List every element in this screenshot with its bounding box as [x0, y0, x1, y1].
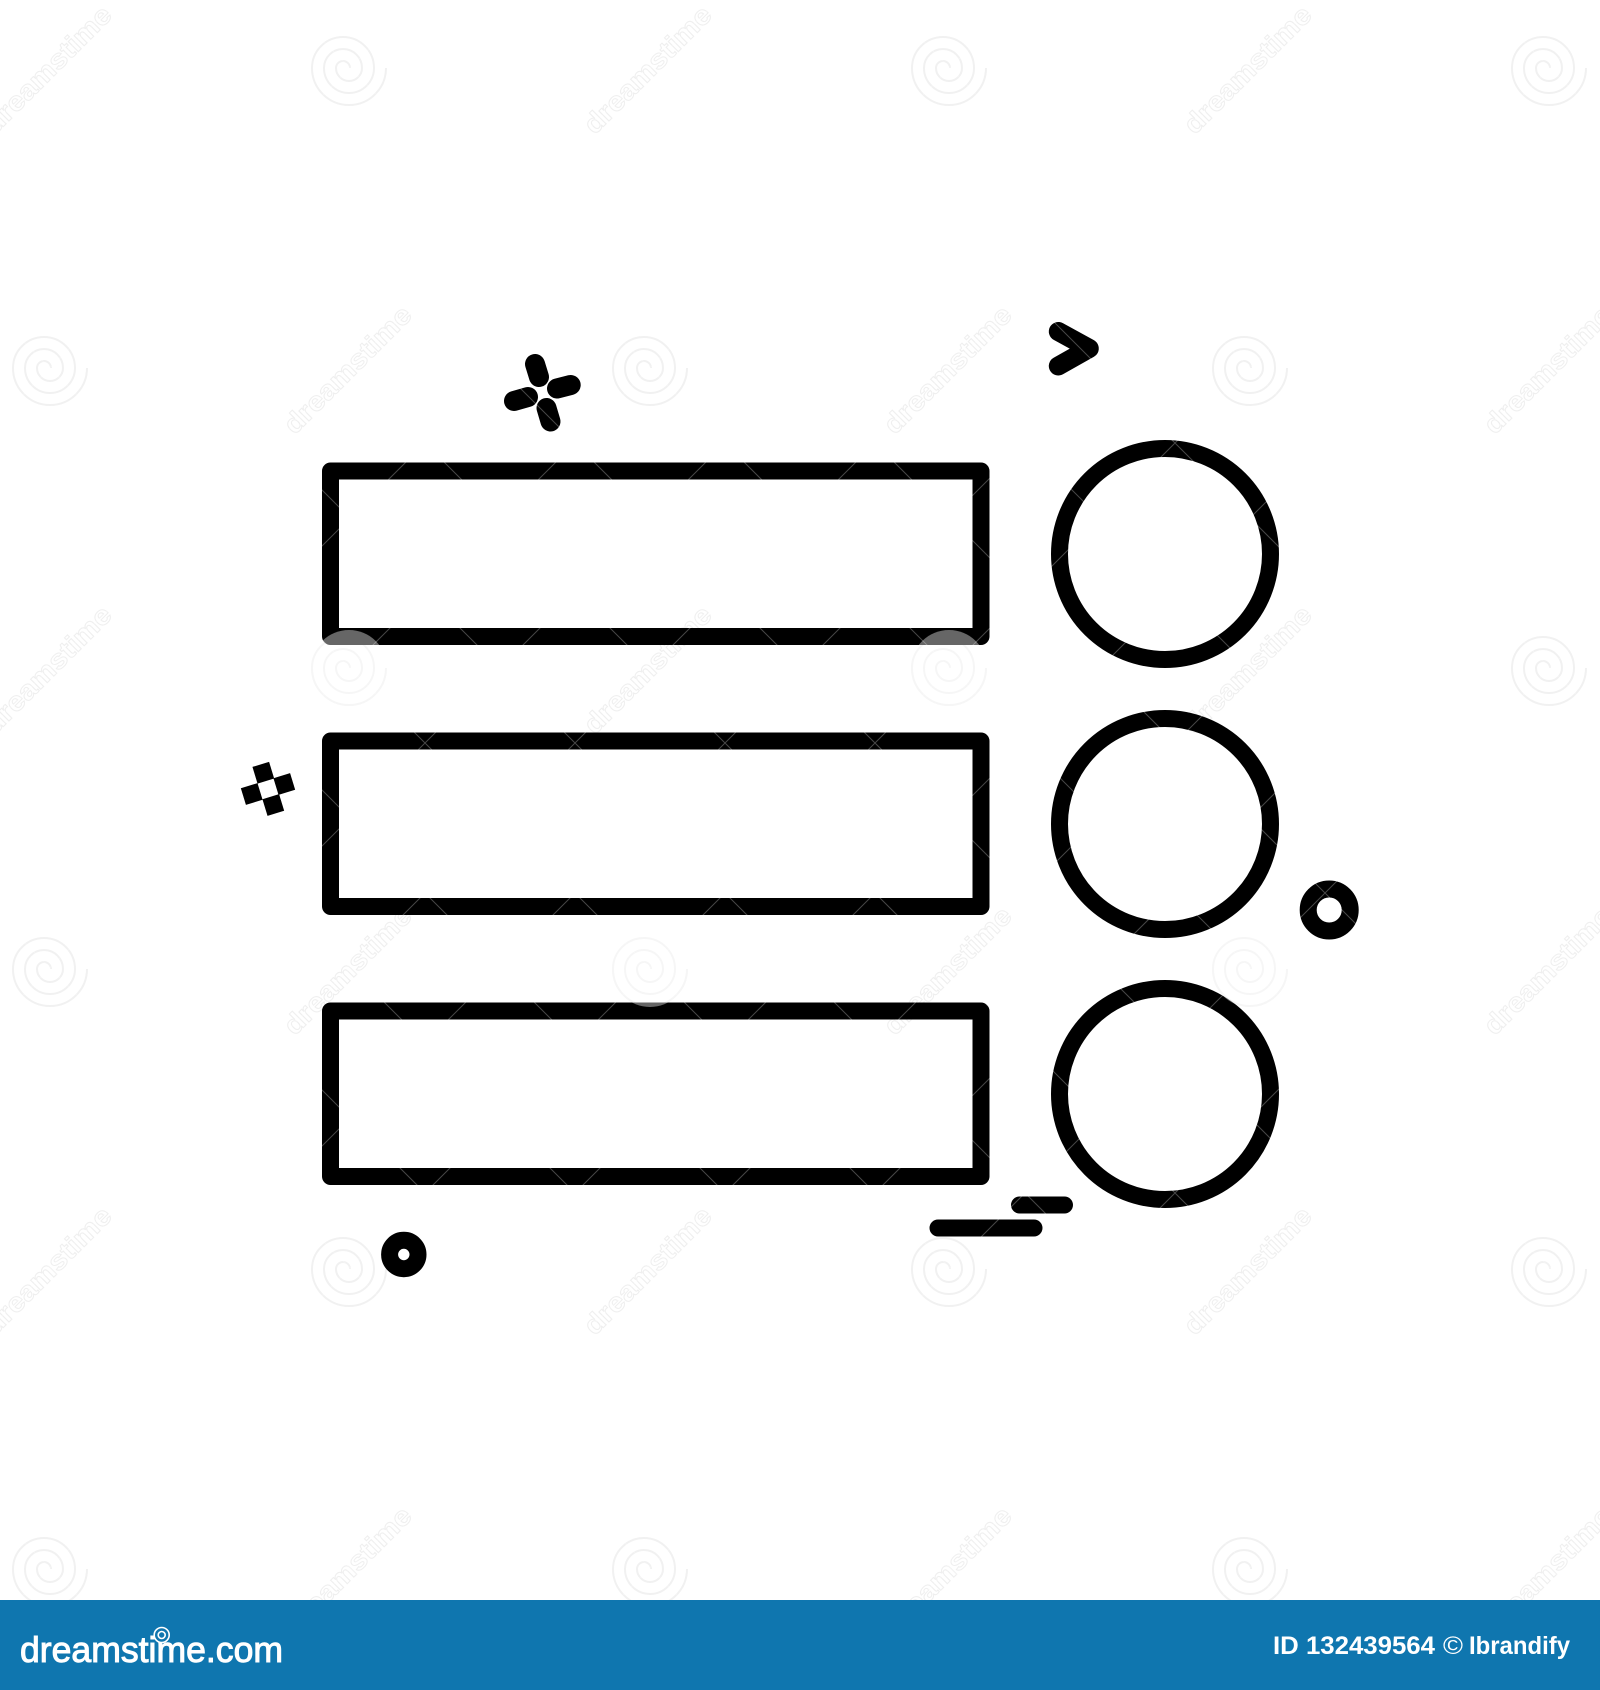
row 2 circle — [1060, 718, 1270, 930]
icon: list of three rows — [330, 448, 1270, 1200]
watermark: diagonal text: dreamstime — [278, 1501, 418, 1641]
logo spiral — [154, 1628, 169, 1642]
watermark: diagonal text: dreamstime — [578, 1201, 718, 1341]
footer logo: dreamstime.com: dreamstime.com — [20, 1629, 283, 1670]
watermark: diagonal text: dreamstime — [578, 600, 718, 740]
watermark: diagonal text: dreamstime — [278, 300, 418, 440]
footer credit: ID 132439564 — [1273, 1632, 1435, 1660]
watermark: diagonal text: dreamstime — [878, 1501, 1018, 1641]
icon: chevron — [1058, 332, 1089, 366]
footer bar — [0, 1600, 1600, 1690]
watermark: diagonal text: dreamstime — [1178, 600, 1318, 740]
row 3 circle — [1060, 988, 1270, 1200]
watermark: diagonal text: dreamstime — [878, 300, 1018, 440]
row 2 bar — [330, 741, 981, 906]
row 3 bar — [330, 1011, 981, 1176]
icon: four-petal sparkle — [514, 364, 571, 422]
footer credit — [1273, 1632, 1570, 1660]
icon: checker diamond — [241, 762, 295, 816]
footer credit: Ibrandify — [1469, 1632, 1570, 1660]
icon: two dashes — [938, 1205, 1064, 1228]
watermark: diagonal text: dreamstime — [278, 901, 418, 1041]
footer credit: © — [1443, 1632, 1464, 1660]
row 1 bar — [330, 471, 981, 636]
icon: small ring right — [1308, 889, 1350, 931]
icon: small ring bottom left — [390, 1240, 418, 1269]
watermark: diagonal text: dreamstime — [1178, 1201, 1318, 1341]
watermark: diagonal text: dreamstime — [878, 901, 1018, 1041]
row 1 circle — [1060, 448, 1270, 660]
watermark: diagonal text: dreamstime — [578, 0, 718, 140]
watermark: diagonal text: dreamstime — [1178, 0, 1318, 140]
